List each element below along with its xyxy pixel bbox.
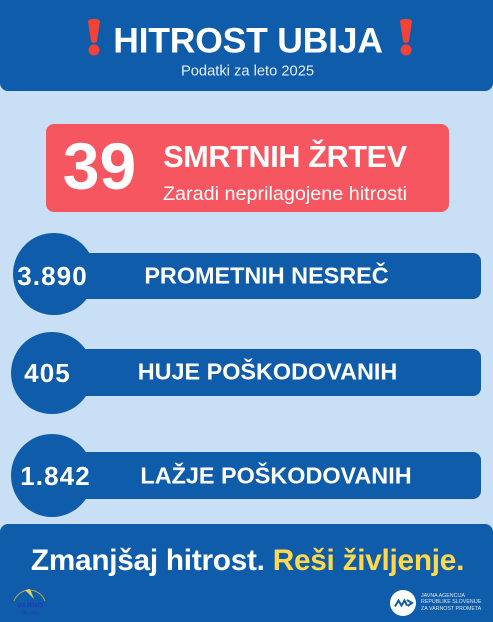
fatalities label: SMRTNIH ŽRTEV [163,139,407,173]
subtitle: Podatki za leto 2025 [181,64,314,80]
stat row: slightly injured [11,434,481,517]
title: HITROST UBIJA [113,20,383,60]
AVP agency text: JAVNA AGENCIJA [421,592,465,598]
fatalities number: 39 [63,129,136,203]
slogan: Zmanjšaj hitrost. Reši življenje. [31,544,464,577]
stat value: 405 [24,358,71,388]
stat label: PROMETNIH NESREČ [144,262,389,288]
icon: varno logo [14,589,46,616]
icon: varno logo: VARNO [17,600,43,610]
icon: AVP logo [390,590,416,616]
AVP agency text: REPUBLIKE SLOVENIJE [421,599,481,605]
stat value: 1.842 [20,461,91,491]
stat row: traffic accidents [13,233,481,315]
icon: right exclamation mark [400,18,412,56]
AVP agency text: ZA VARNOST PROMETA [421,606,481,612]
stat label: HUJE POŠKODOVANIH [138,358,397,384]
icon: varno logo: do cilja [22,610,38,616]
fatalities note: Zaradi neprilagojene hitrosti [163,183,407,205]
panel: fatalities callout [46,124,449,212]
footer panel [0,524,493,622]
stat label: LAŽJE POŠKODOVANIH [140,462,412,488]
stat value: 3.890 [17,260,88,290]
icon: left exclamation mark [88,18,100,56]
AVP agency text [421,592,482,612]
header panel [0,0,493,91]
stat row: seriously injured [11,332,481,414]
